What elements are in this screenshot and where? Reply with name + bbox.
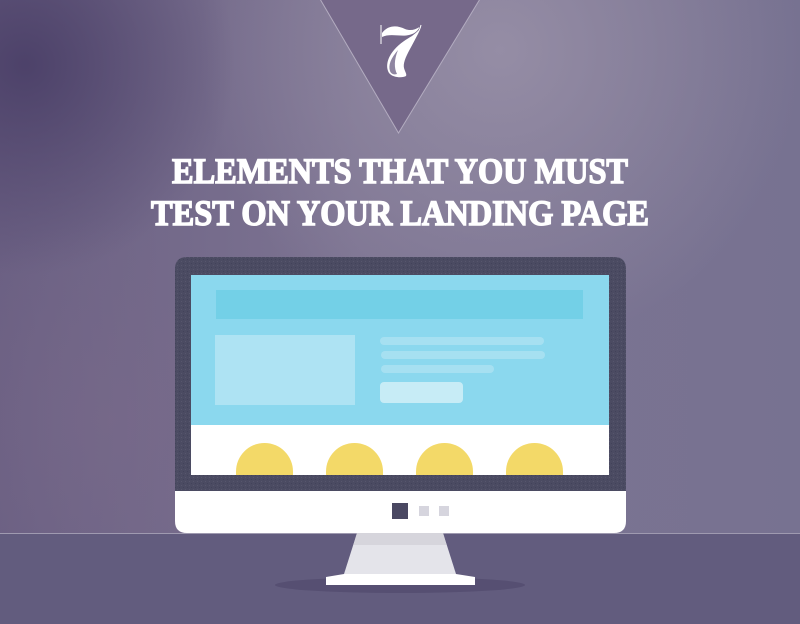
number 7 [381, 25, 421, 77]
header bar [216, 290, 583, 319]
floor [0, 533, 800, 624]
chin [175, 491, 626, 533]
title [151, 151, 649, 233]
chin indicators [392, 503, 449, 519]
hero image [215, 335, 355, 405]
button [380, 382, 463, 403]
monitor stand [326, 533, 475, 585]
badge: triangle with number 7 [320, 0, 480, 133]
screen: hero [191, 275, 609, 425]
title line 2: TEST ON YOUR LANDING PAGE [151, 193, 649, 233]
bezel [175, 257, 626, 491]
text lines [380, 337, 545, 373]
stand shadow [275, 577, 525, 593]
title line 1: ELEMENTS THAT YOU MUST [172, 151, 628, 191]
yellow circles [236, 443, 563, 475]
screen: features row [191, 425, 609, 475]
monitor [175, 257, 626, 533]
